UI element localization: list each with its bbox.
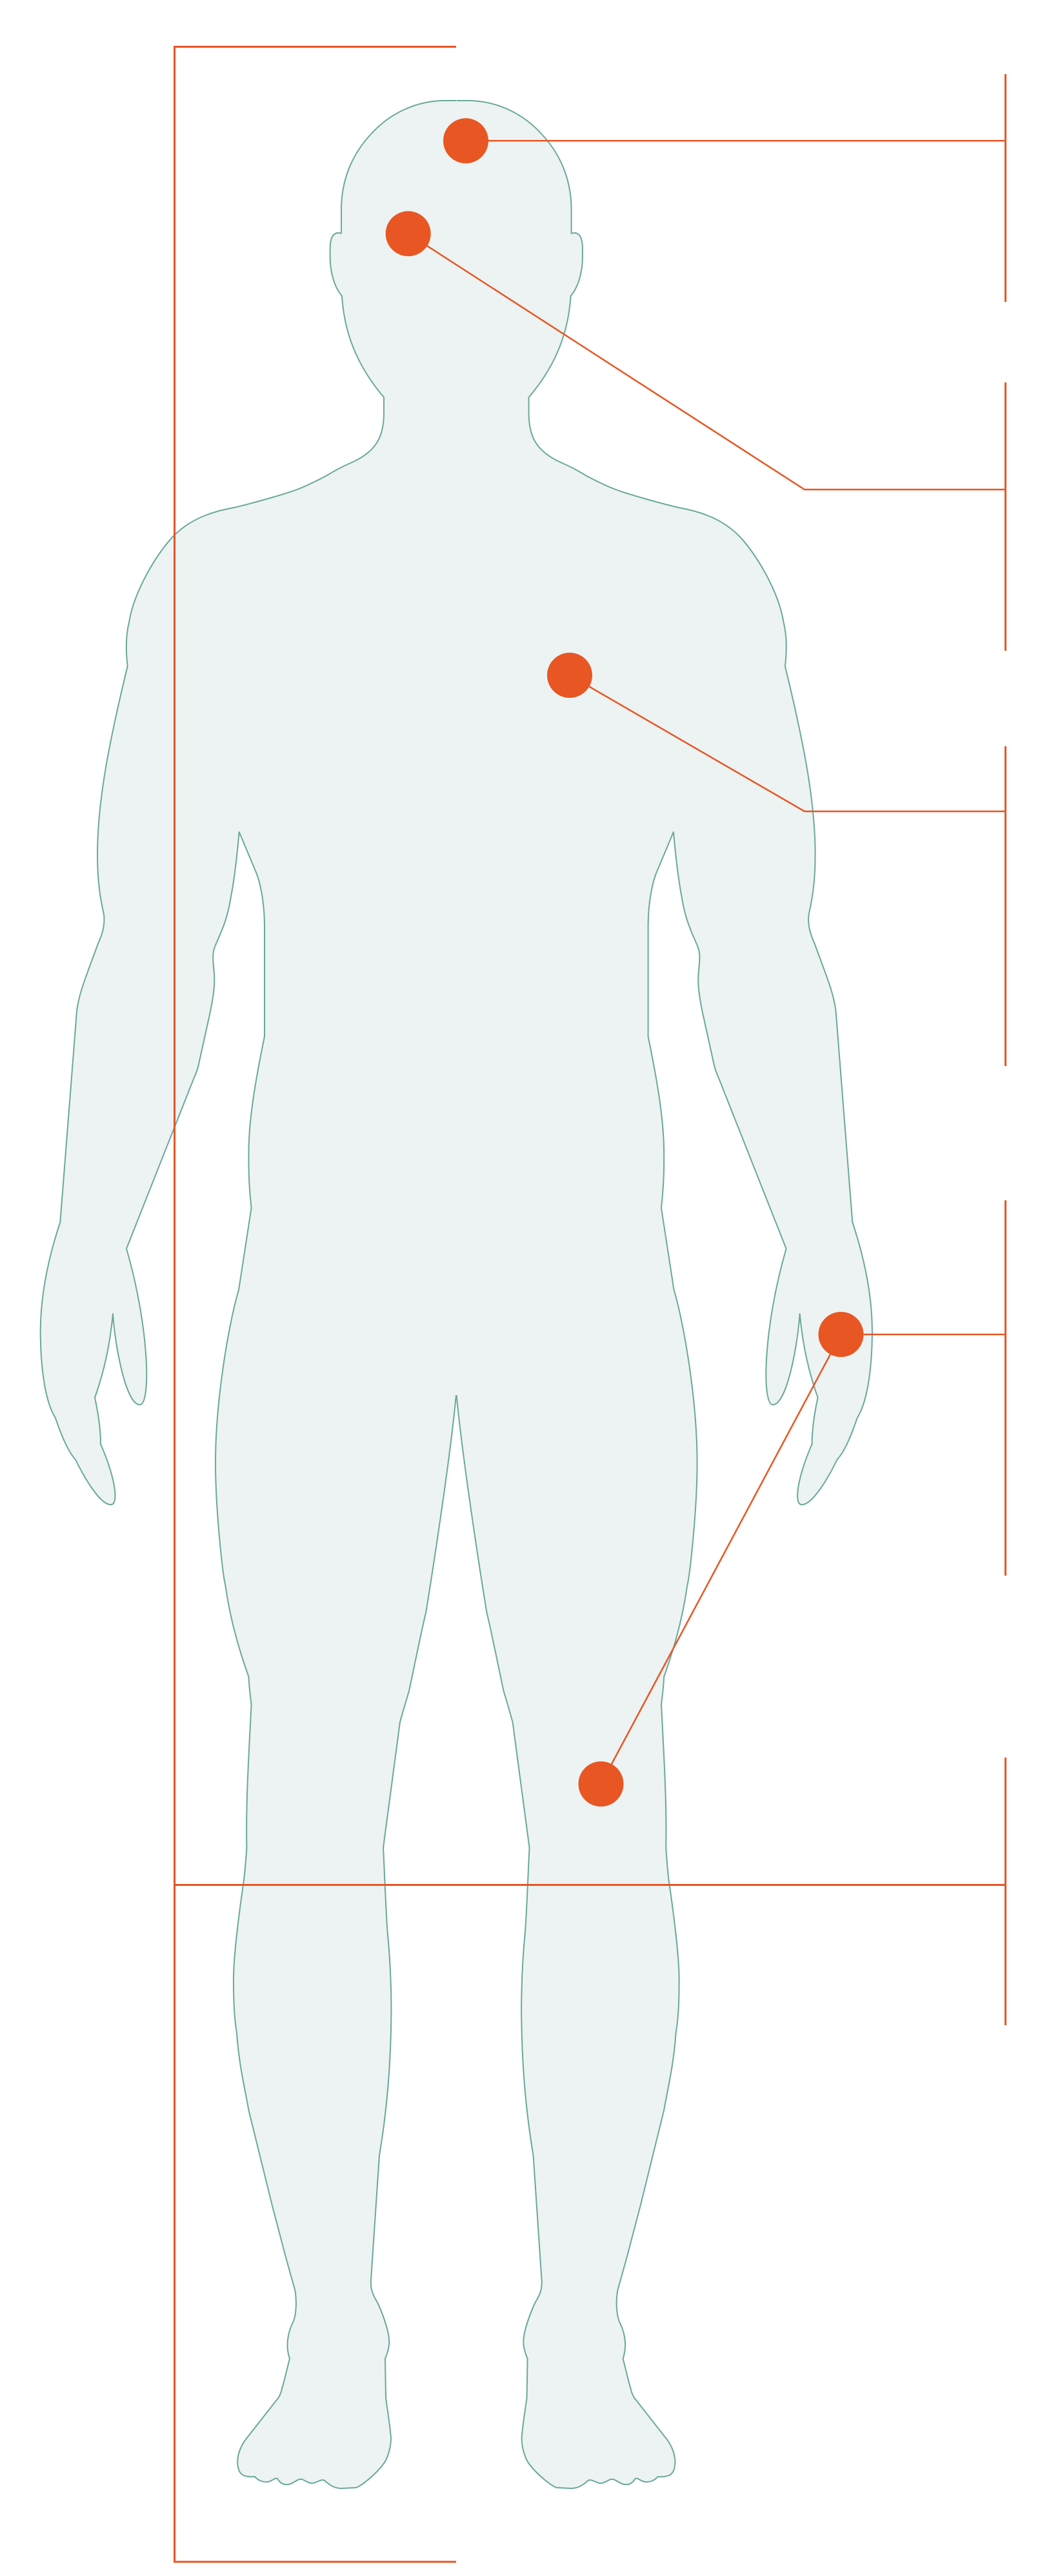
left half of body [41, 101, 456, 2488]
marker dots [386, 118, 863, 1807]
horizontal line across lower legs [174, 1884, 1005, 1886]
human body silhouette [41, 101, 872, 2488]
right scale bars [1005, 74, 1006, 2025]
right half of body [457, 101, 872, 2488]
left bracket frame [174, 46, 456, 2562]
leader lines [408, 141, 1005, 1784]
